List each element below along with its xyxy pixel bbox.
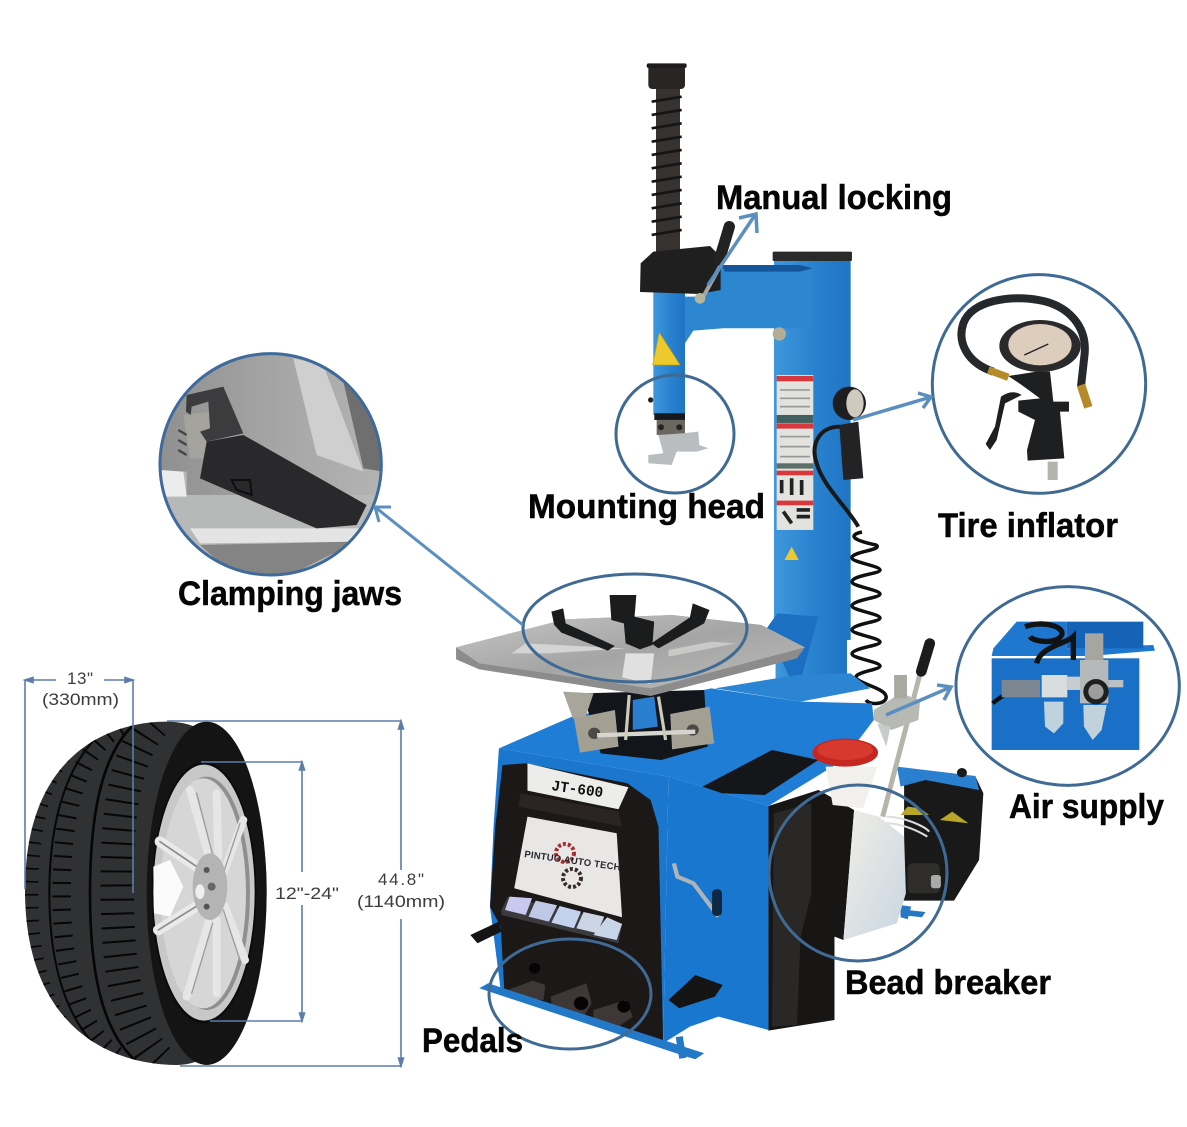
lower warning label bbox=[777, 547, 807, 575]
gun body bbox=[1008, 372, 1069, 461]
arrow: tire inflator bbox=[853, 393, 931, 420]
safety stickers bbox=[777, 375, 813, 530]
body front face bbox=[490, 748, 668, 1043]
body top face bbox=[499, 688, 874, 806]
tire changer machine: upper column and arm bbox=[640, 63, 866, 640]
logo plate bbox=[514, 817, 622, 917]
bead breaker handle bbox=[883, 643, 930, 817]
gauge bbox=[999, 320, 1081, 372]
tire changer machine: lower body bbox=[456, 560, 983, 1059]
clamping jaw arms bbox=[551, 595, 710, 651]
label: Air supply: Air supply bbox=[1009, 788, 1164, 826]
label: Clamping jaws: Clamping jaws bbox=[178, 575, 402, 613]
machine plate text: JT-600 bbox=[550, 778, 604, 802]
company logo bbox=[524, 844, 621, 887]
bead breaker shovel bbox=[768, 790, 854, 1031]
label: Bead breaker: Bead breaker bbox=[845, 964, 1051, 1002]
pedals bbox=[508, 963, 633, 1027]
accessory tray bbox=[702, 750, 818, 795]
control buttons bbox=[501, 897, 622, 943]
threaded shaft with spring bbox=[647, 63, 687, 252]
turntable underside bbox=[583, 690, 708, 760]
photo of regulator unit bbox=[992, 622, 1155, 750]
warning label bbox=[653, 333, 680, 365]
company logo: PINTUO AUTO TECH bbox=[524, 849, 621, 873]
arrow: clamping jaws bbox=[375, 507, 523, 625]
rear bead breaker housing bbox=[886, 767, 983, 919]
dimension: tire diameter: 44.8" bbox=[378, 870, 424, 889]
turntable bbox=[456, 615, 805, 696]
column base and gusset bbox=[715, 560, 870, 702]
callout circle: mounting head bbox=[616, 375, 734, 493]
body side face bbox=[663, 777, 768, 1043]
locking handle bbox=[695, 227, 729, 304]
locking head block bbox=[640, 246, 721, 294]
dimension: rim diameter: 12"-24" bbox=[275, 884, 339, 903]
dimension: tire diameter bbox=[357, 870, 445, 911]
inflator on column bbox=[815, 387, 866, 527]
dimension: width bbox=[42, 669, 119, 709]
detail circle: tire inflator bbox=[932, 275, 1146, 493]
jaw brackets bbox=[563, 692, 714, 753]
lubricant cup bbox=[812, 739, 878, 808]
dimension lines bbox=[25, 678, 404, 1066]
column bbox=[774, 257, 851, 640]
mounting head tool bbox=[648, 397, 708, 465]
model plate bbox=[519, 763, 628, 827]
tire with rim bbox=[25, 722, 267, 1065]
side release lever bbox=[674, 863, 722, 917]
air regulator bbox=[874, 675, 920, 747]
label: Pedals: Pedals bbox=[422, 1022, 523, 1060]
callout ellipse: pedals bbox=[489, 939, 651, 1049]
detail circle: air supply bbox=[956, 587, 1179, 785]
hose bbox=[961, 298, 1088, 407]
label: Manual locking: Manual locking bbox=[716, 179, 952, 217]
bead breaker white cover bbox=[843, 810, 906, 940]
black front panel bbox=[490, 763, 663, 1043]
arrow: manual locking bbox=[708, 214, 757, 285]
arrow: air supply bbox=[886, 685, 951, 715]
label: Mounting head: Mounting head bbox=[528, 488, 765, 526]
vertical tube bbox=[653, 292, 685, 415]
coiled air hose bbox=[852, 532, 886, 703]
detail circle: clamping jaws bbox=[158, 352, 383, 576]
callout ellipse: turntable jaws bbox=[523, 574, 747, 682]
dimension: width: (330mm) bbox=[42, 690, 119, 709]
dimension: tire diameter: (1140mm) bbox=[357, 892, 445, 911]
side foot pedals bbox=[470, 922, 723, 1008]
callout circle: bead breaker bbox=[769, 785, 947, 961]
foot bar bbox=[479, 983, 704, 1059]
swing arm bbox=[685, 265, 813, 343]
dimension: width: 13" bbox=[67, 669, 93, 688]
label: Tire inflator: Tire inflator bbox=[938, 507, 1118, 545]
